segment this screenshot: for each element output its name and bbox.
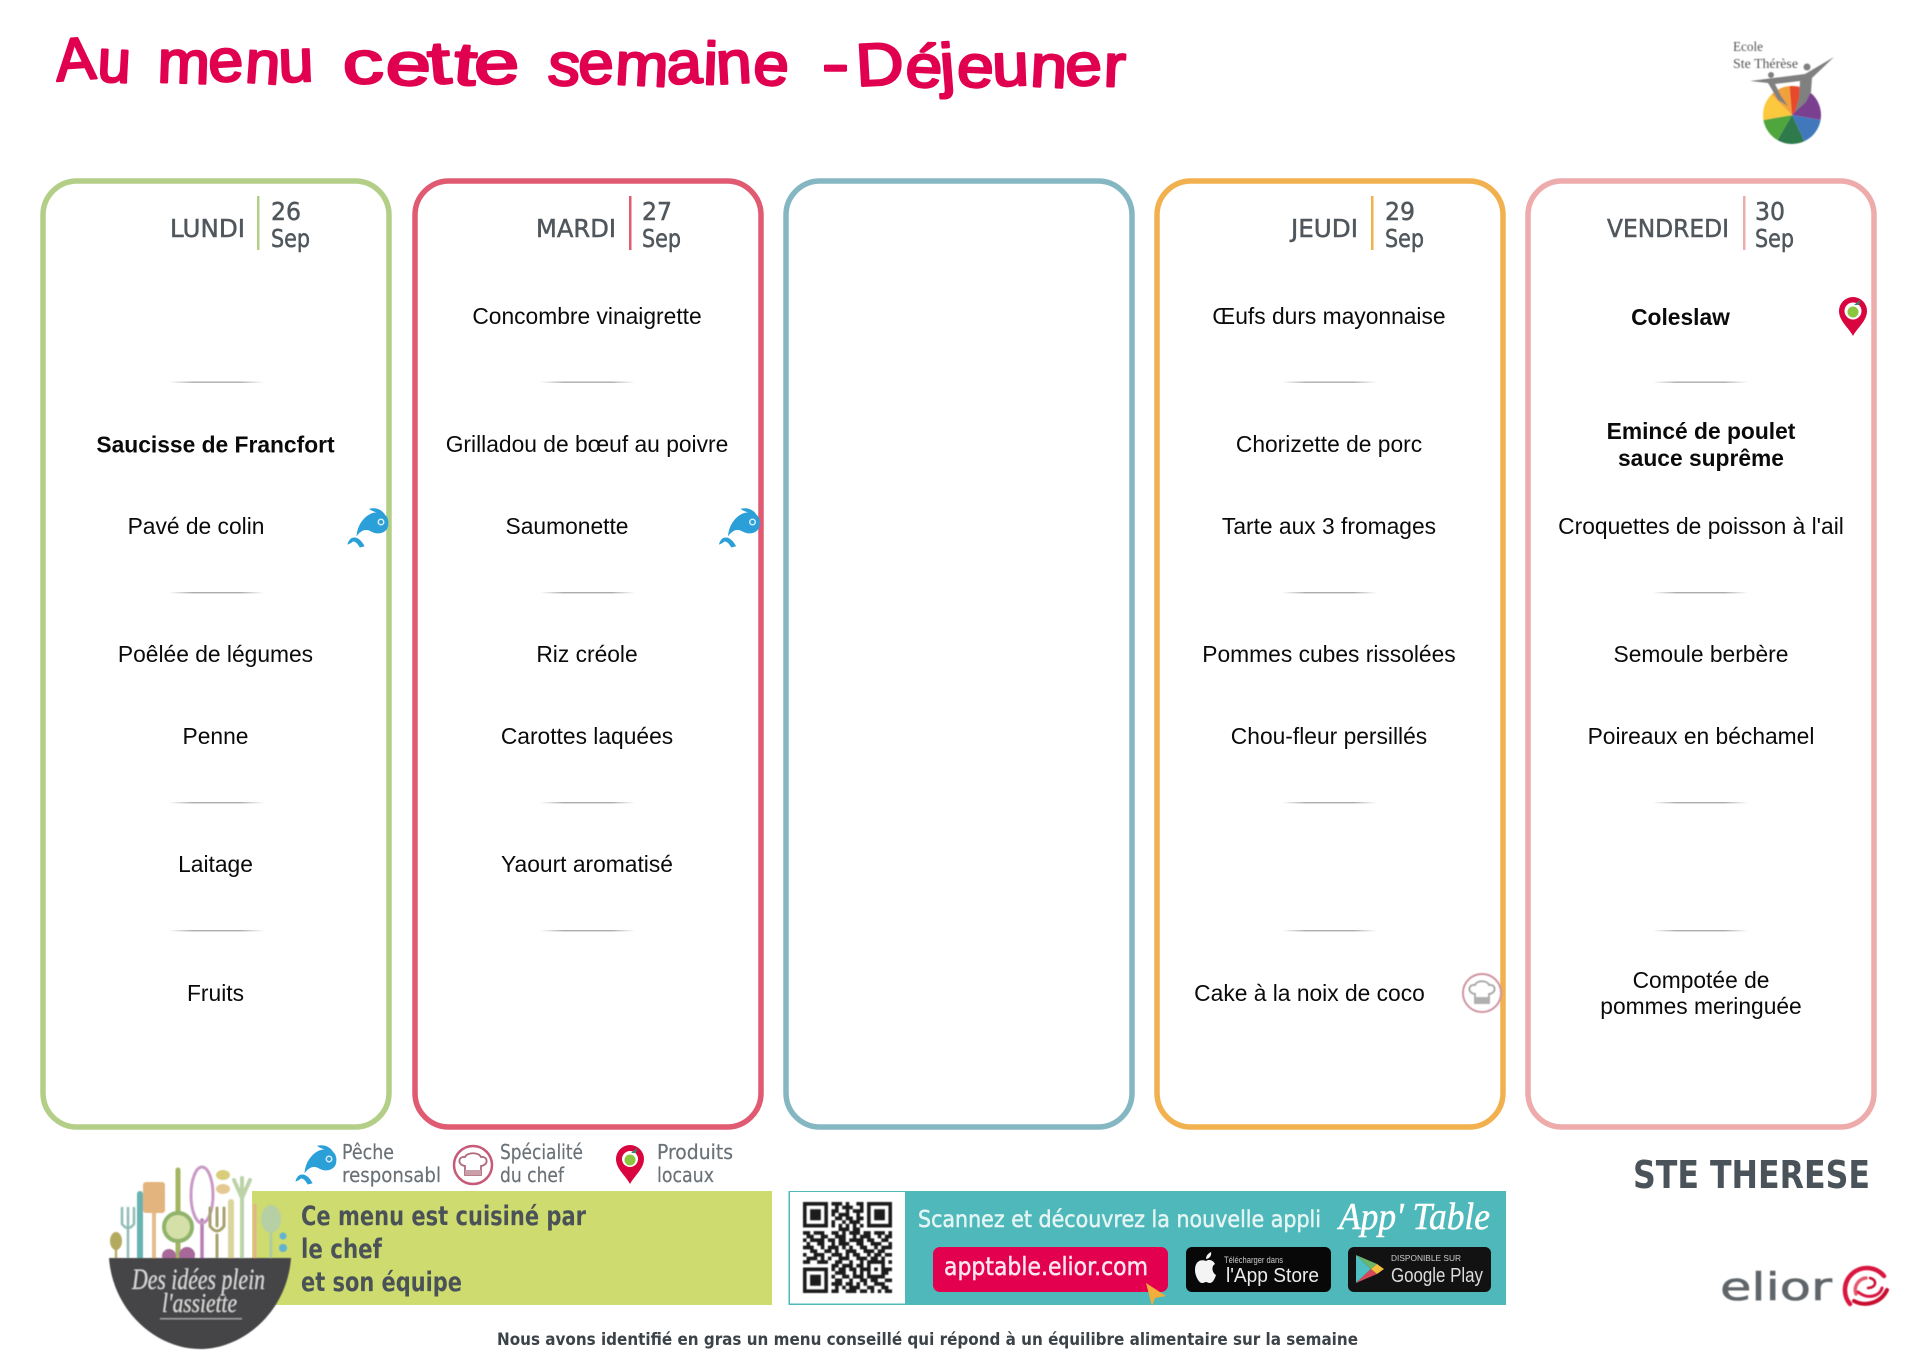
panel: vendredi: Semoule berbère bbox=[1614, 641, 1788, 667]
title: Au bbox=[53, 24, 133, 96]
button: google play bbox=[1348, 1247, 1491, 1292]
panel: mardi: Yaourt aromatisé bbox=[501, 851, 673, 877]
legend: produits locaux: Produits bbox=[657, 1140, 733, 1164]
heading: lundi: 26 bbox=[271, 197, 301, 226]
button: app store: l'App Store bbox=[1226, 1265, 1319, 1287]
site name: STE THERESE bbox=[1633, 1153, 1870, 1197]
banner text: Scannez et découvrez la nouvelle appli bbox=[918, 1207, 1321, 1233]
heading: lundi: Sep bbox=[271, 224, 310, 253]
logo: elior bbox=[1720, 1265, 1887, 1309]
panel: vendredi: Compotée de bbox=[1633, 967, 1769, 993]
heading: jeudi: JEUDI bbox=[1289, 214, 1358, 243]
text: chef: le chef bbox=[301, 1234, 382, 1265]
button: app store bbox=[1186, 1247, 1331, 1292]
legend: spécialité du chef: Spécialité bbox=[500, 1140, 583, 1164]
panel: mardi: Grilladou de bœuf au poivre bbox=[446, 431, 728, 457]
title bbox=[53, 24, 1127, 101]
panel: jeudi: Chorizette de porc bbox=[1236, 431, 1422, 457]
heading: mardi: MARDI bbox=[536, 214, 616, 243]
text: chef bbox=[301, 1201, 587, 1298]
banner script: app table: App' Table bbox=[1336, 1196, 1490, 1238]
logo: école Ste Thérèse bbox=[1733, 40, 1834, 144]
button: apptable.elior.com: apptable.elior.com bbox=[944, 1252, 1148, 1281]
icon: chef hat bbox=[1463, 974, 1501, 1012]
panel: mercredi (empty) bbox=[786, 181, 1132, 1127]
button: apptable.elior.com bbox=[933, 1247, 1168, 1306]
panel: mardi: Riz créole bbox=[536, 641, 638, 667]
panel: mardi: Concombre vinaigrette bbox=[472, 303, 702, 329]
logo: des idées plein l'assiette: Des idées plein bbox=[131, 1263, 265, 1296]
panel: lundi: Poêlée de légumes bbox=[118, 641, 313, 667]
panel: mardi: Carottes laquées bbox=[501, 723, 673, 749]
title: cette bbox=[341, 28, 520, 99]
legend: produits locaux: locaux bbox=[657, 1163, 714, 1187]
panel: jeudi: Cake à la noix de coco bbox=[1194, 980, 1425, 1006]
panel: vendredi: Coleslaw bbox=[1631, 304, 1730, 330]
heading: vendredi bbox=[1607, 196, 1794, 253]
heading: jeudi: 29 bbox=[1385, 197, 1415, 226]
text: chef: et son équipe bbox=[301, 1267, 462, 1298]
panel: jeudi: Pommes cubes rissolées bbox=[1202, 641, 1456, 667]
panel: lundi: Pavé de colin bbox=[128, 513, 264, 539]
panel: mardi bbox=[415, 181, 761, 1127]
logo: des idées plein l'assiette bbox=[109, 1167, 291, 1349]
panel: vendredi: pommes meringuée bbox=[1600, 993, 1802, 1019]
panel: vendredi: Poireaux en béchamel bbox=[1588, 723, 1814, 749]
legend: pêche responsable: responsabl bbox=[342, 1163, 441, 1187]
logo: école Ste Thérèse: Ecole bbox=[1733, 40, 1763, 55]
text: chef: Ce menu est cuisiné par bbox=[301, 1201, 587, 1232]
footer note: Nous avons identifié en gras un menu conseillé qui répond à un équilibre alimentaire sur la semaine bbox=[497, 1330, 1358, 1350]
heading: mardi bbox=[536, 196, 681, 253]
panel: mardi: Saumonette bbox=[506, 513, 628, 539]
heading: vendredi: Sep bbox=[1755, 224, 1794, 253]
title: menu bbox=[157, 26, 314, 97]
icon: local pin bbox=[1839, 297, 1867, 336]
panel: lundi: Saucisse de Francfort bbox=[96, 432, 335, 458]
panel: lundi: Laitage bbox=[178, 851, 253, 877]
heading: mardi: 27 bbox=[642, 197, 672, 226]
panel: vendredi bbox=[1528, 181, 1874, 1127]
panel: jeudi: Chou-fleur persillés bbox=[1231, 723, 1427, 749]
panel: jeudi: Tarte aux 3 fromages bbox=[1222, 513, 1436, 539]
panel: jeudi bbox=[1157, 181, 1503, 1127]
title: - bbox=[822, 30, 849, 97]
heading: jeudi: Sep bbox=[1385, 224, 1424, 253]
banner: app table bbox=[788, 1191, 1506, 1306]
icon: fish bbox=[348, 509, 388, 547]
logo: elior: elior bbox=[1720, 1265, 1832, 1309]
title: Déjeuner bbox=[854, 30, 1127, 101]
button: google play: DISPONIBLE SUR bbox=[1391, 1254, 1461, 1263]
heading: lundi: LUNDI bbox=[170, 214, 245, 243]
legend: pêche responsable bbox=[296, 1140, 441, 1187]
green band bbox=[252, 1191, 772, 1305]
heading: jeudi bbox=[1289, 196, 1424, 253]
logo: école Ste Thérèse: Ste Thérèse bbox=[1733, 57, 1798, 72]
title: semaine bbox=[546, 28, 791, 100]
button: app store: Télécharger dans bbox=[1224, 1255, 1283, 1265]
panel: lundi bbox=[43, 181, 389, 1127]
panel: jeudi: Œufs durs mayonnaise bbox=[1212, 303, 1446, 329]
heading: vendredi: VENDREDI bbox=[1607, 214, 1729, 243]
panel: vendredi: Croquettes de poisson à l'ail bbox=[1558, 513, 1844, 539]
panel: vendredi: Emincé de poulet bbox=[1607, 418, 1796, 444]
button: google play: Google Play bbox=[1391, 1265, 1483, 1287]
legend: spécialité du chef bbox=[454, 1140, 583, 1187]
heading: vendredi: 30 bbox=[1755, 197, 1785, 226]
panel: vendredi: sauce suprême bbox=[1618, 445, 1784, 471]
legend: produits locaux bbox=[616, 1140, 733, 1187]
logo: des idées plein l'assiette: l'assiette bbox=[162, 1288, 237, 1318]
legend: spécialité du chef: du chef bbox=[500, 1163, 565, 1187]
qr code bbox=[803, 1202, 892, 1293]
heading: mardi: Sep bbox=[642, 224, 681, 253]
panel: lundi: Fruits bbox=[187, 980, 244, 1006]
icon: fish bbox=[720, 509, 760, 547]
panel: lundi: Penne bbox=[183, 723, 248, 749]
legend: pêche responsable: Pêche bbox=[342, 1140, 394, 1164]
heading: lundi bbox=[170, 196, 310, 253]
